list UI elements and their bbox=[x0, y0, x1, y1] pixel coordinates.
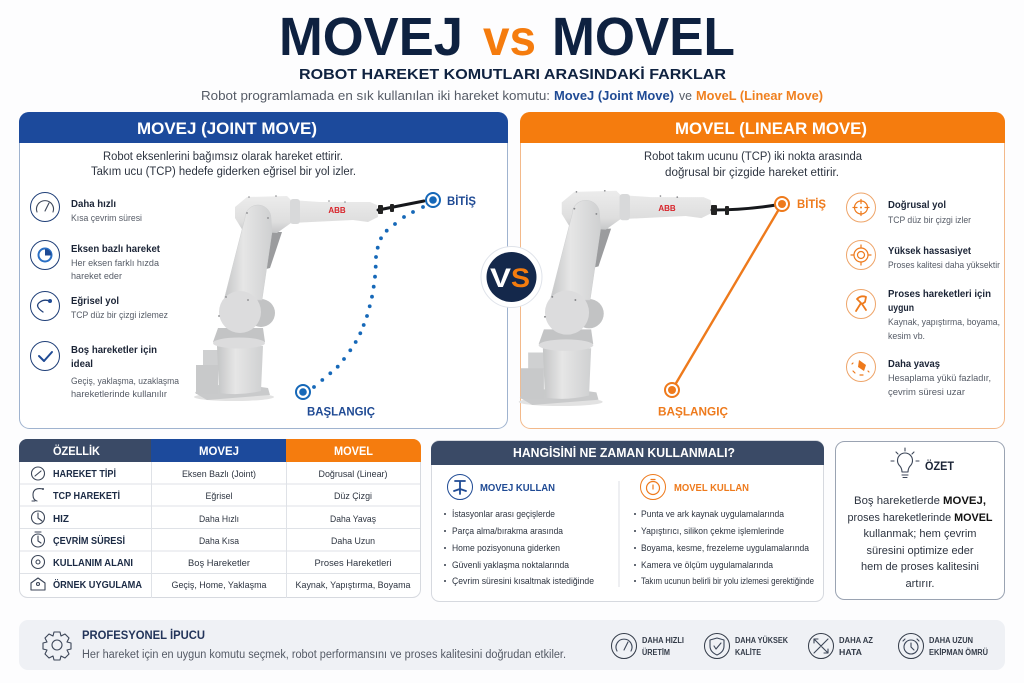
movel use list: Boyama, kesme, frezeleme uygulamalarında bbox=[641, 543, 809, 553]
when to use header bbox=[431, 441, 824, 465]
benefit: higher quality: KALİTE bbox=[735, 648, 762, 657]
robot arm left: ABB bbox=[328, 206, 346, 215]
movel use list: Kamera ve ölçüm uygulamalarında bbox=[641, 560, 773, 570]
end point: BİTİŞ bbox=[797, 196, 826, 211]
feature: daha hizli: Daha hızlı bbox=[71, 198, 116, 210]
feature: dogrusal yol bbox=[846, 193, 971, 226]
feature: egrisel yol bbox=[30, 292, 168, 321]
benefit: fewer errors: HATA bbox=[839, 648, 862, 657]
curved dotted path bbox=[312, 205, 425, 389]
feature: bos hareketler: hareketlerinde kullanılır bbox=[71, 389, 167, 400]
benefit: higher quality: DAHA YÜKSEK bbox=[735, 636, 788, 645]
row: hiz: Daha Yavaş bbox=[330, 514, 376, 525]
row: ornek uygulama: Geçiş, Home, Yaklaşma bbox=[172, 580, 267, 591]
feature: proses hareketleri: kesim vb. bbox=[888, 331, 925, 342]
row: tcp hareketi: TCP HAREKETİ bbox=[53, 489, 120, 502]
movel use list: MOVEL KULLAN bbox=[674, 482, 749, 494]
movej use list: Home pozisyonuna giderken bbox=[452, 543, 560, 553]
feature: daha hizli: Kısa çevrim süresi bbox=[71, 213, 142, 224]
row: kullanim alani: Boş Hareketler bbox=[188, 558, 250, 569]
summary text: proses hareketlerinde MOVEL bbox=[848, 512, 993, 524]
panel: pro tip bbox=[19, 620, 1005, 670]
start point: BAŞLANGIÇ bbox=[658, 404, 728, 418]
feature: daha yavas: Daha yavaş bbox=[888, 358, 940, 370]
feature: yuksek hassasiyet: Yüksek hassasiyet bbox=[888, 245, 971, 257]
movej use list: Güvenli yaklaşma noktalarında bbox=[452, 560, 569, 570]
movel header bbox=[520, 112, 1005, 143]
row: kullanim alani: Proses Hareketleri bbox=[314, 558, 392, 569]
benefit: fewer errors: DAHA AZ bbox=[839, 636, 873, 645]
icon: gear bbox=[43, 632, 71, 660]
movel use list: Punta ve ark kaynak uygulamalarında bbox=[641, 509, 784, 519]
row: hareket tipi: Eksen Bazlı (Joint) bbox=[182, 469, 256, 480]
title bbox=[279, 7, 735, 67]
title: MOVEJ bbox=[279, 7, 463, 67]
feature: daha yavas: Hesaplama yükü fazladır, bbox=[888, 373, 991, 384]
start point bbox=[296, 385, 375, 418]
intro line: Robot programlamada en sık kullanılan iki hareket komutu: bbox=[201, 88, 550, 103]
row: kullanim alani: KULLANIM ALANI bbox=[53, 558, 133, 569]
movej header: MOVEJ (JOINT MOVE) bbox=[137, 120, 317, 138]
feature: daha yavas: çevrim süresi uzar bbox=[888, 387, 965, 398]
benefit: faster production: ÜRETİM bbox=[642, 648, 670, 657]
feature: bos hareketler: Geçiş, yaklaşma, uzaklaşma bbox=[71, 376, 180, 387]
summary text: süresini optimize eder bbox=[866, 545, 974, 557]
benefit: faster production: DAHA HIZLI bbox=[642, 636, 684, 645]
row: tcp hareketi: Düz Çizgi bbox=[334, 491, 372, 502]
tip text: Her hareket için en uygun komutu seçmek, robot performansını ve proses kalitesini doğrudan etkiler. bbox=[82, 649, 566, 661]
summary text: kullanmak; hem çevrim bbox=[864, 528, 976, 540]
table header: ÖZELLİK bbox=[53, 445, 101, 458]
feature: proses hareketleri: Kaynak, yapıştırma, boyama, bbox=[888, 317, 1000, 328]
feature: bos hareketler: Boş hareketler için bbox=[71, 344, 157, 356]
row: ornek uygulama: ÖRNEK UYGULAMA bbox=[53, 578, 142, 591]
intro line: ve bbox=[679, 88, 692, 103]
feature: bos hareketler bbox=[30, 342, 180, 400]
benefit: higher quality bbox=[704, 634, 788, 658]
row: kullanim alani bbox=[32, 556, 392, 569]
feature: proses hareketleri: uygun bbox=[888, 302, 914, 314]
feature: proses hareketleri: Proses hareketleri için bbox=[888, 288, 991, 300]
feature: proses hareketleri bbox=[846, 288, 1000, 342]
row: cevrim suresi: ÇEVRİM SÜRESİ bbox=[53, 534, 125, 547]
summary text: Boş hareketlerde MOVEJ, bbox=[854, 495, 986, 507]
movel use list bbox=[634, 474, 814, 586]
summary heading: ÖZET bbox=[925, 460, 954, 473]
benefit: faster production bbox=[612, 634, 684, 658]
row: ornek uygulama bbox=[31, 578, 411, 591]
table header: MOVEJ bbox=[199, 444, 239, 458]
robot arm left bbox=[194, 195, 424, 401]
title: MOVEL bbox=[552, 7, 735, 67]
tip heading: PROFESYONEL İPUCU bbox=[82, 627, 205, 642]
feature: eksen bazli bbox=[30, 240, 160, 282]
intro line: MoveJ (Joint Move) bbox=[554, 88, 674, 103]
panel: summary bbox=[836, 442, 1004, 600]
feature: eksen bazli: Her eksen farklı hızda bbox=[71, 258, 160, 269]
robot arm right bbox=[519, 190, 776, 406]
title: vs bbox=[483, 10, 536, 66]
movej use list: Çevrim süresini kısaltmak istediğinde bbox=[452, 576, 594, 586]
row: hareket tipi: Doğrusal (Linear) bbox=[318, 469, 388, 480]
intro line bbox=[201, 88, 823, 103]
table header: MOVEL bbox=[334, 444, 373, 458]
panel: movel bbox=[519, 112, 1005, 428]
benefit: longer equipment life: DAHA UZUN bbox=[929, 636, 973, 645]
feature: yuksek hassasiyet: Proses kalitesi daha yüksektir bbox=[888, 260, 1000, 271]
vs badge bbox=[481, 246, 542, 308]
panel: movej bbox=[19, 112, 508, 428]
feature: eksen bazli: Eksen bazlı hareket bbox=[71, 243, 160, 255]
movej use list: İstasyonlar arası geçişlerde bbox=[452, 509, 555, 519]
summary text: artırır. bbox=[906, 578, 934, 590]
row: hiz: HIZ bbox=[53, 514, 69, 525]
feature: eksen bazli: hareket eder bbox=[71, 271, 122, 282]
feature: daha yavas bbox=[846, 352, 991, 398]
row: cevrim suresi: Daha Uzun bbox=[331, 536, 375, 547]
end point: BİTİŞ bbox=[447, 193, 476, 208]
vs badge: V bbox=[490, 263, 511, 293]
panel: when to use bbox=[431, 440, 824, 602]
feature: dogrusal yol: Doğrusal yol bbox=[888, 199, 946, 211]
end point bbox=[775, 196, 826, 211]
end point bbox=[426, 193, 476, 208]
vs badge: S bbox=[511, 263, 530, 293]
feature: bos hareketler: ideal bbox=[71, 358, 93, 370]
movej header bbox=[19, 112, 508, 143]
summary text: hem de proses kalitesini bbox=[861, 561, 979, 573]
row: hiz: Daha Hızlı bbox=[199, 514, 239, 525]
straight line path bbox=[672, 204, 782, 390]
movel description: Robot takım ucunu (TCP) iki nokta arasında bbox=[644, 151, 863, 163]
row: hareket tipi: HAREKET TİPİ bbox=[53, 467, 116, 480]
movej description: Takım ucu (TCP) hedefe giderken eğrisel bir yol izler. bbox=[91, 166, 356, 178]
movel use list: Yapıştırıcı, silikon çekme işlemlerinde bbox=[641, 526, 784, 536]
icon: light bulb bbox=[891, 448, 919, 478]
feature: dogrusal yol: TCP düz bir çizgi izler bbox=[888, 215, 971, 226]
table header bbox=[19, 439, 421, 462]
feature: daha hizli bbox=[30, 192, 142, 224]
benefit: fewer errors bbox=[808, 634, 873, 658]
feature: egrisel yol: Eğrisel yol bbox=[71, 295, 119, 307]
robot arm right: ABB bbox=[658, 204, 676, 213]
row: tcp hareketi bbox=[32, 488, 372, 502]
subtitle: ROBOT HAREKET KOMUTLARI ARASINDAKİ FARKLAR bbox=[299, 66, 726, 83]
feature: egrisel yol: TCP düz bir çizgi izlemez bbox=[71, 310, 168, 321]
row: hiz bbox=[32, 511, 376, 525]
summary text bbox=[848, 495, 993, 590]
benefit: longer equipment life: EKİPMAN ÖMRÜ bbox=[929, 648, 988, 657]
row: ornek uygulama: Kaynak, Yapıştırma, Boyama bbox=[296, 580, 411, 591]
intro line: MoveL (Linear Move) bbox=[696, 88, 823, 103]
movel header: MOVEL (LINEAR MOVE) bbox=[675, 120, 867, 138]
movej use list: Parça alma/bırakma arasında bbox=[452, 526, 563, 536]
start point: BAŞLANGIÇ bbox=[307, 404, 375, 418]
movej description: Robot eksenlerini bağımsız olarak hareket ettirir. bbox=[103, 151, 343, 163]
movel description: doğrusal bir çizgide hareket ettirir. bbox=[665, 167, 839, 179]
comparison table bbox=[19, 439, 421, 598]
feature: yuksek hassasiyet bbox=[846, 240, 1000, 271]
movel description bbox=[644, 151, 863, 179]
movej use list: MOVEJ KULLAN bbox=[480, 482, 555, 494]
row: hareket tipi bbox=[32, 467, 388, 480]
when to use header: HANGİSİNİ NE ZAMAN KULLANMALI? bbox=[513, 445, 735, 460]
movej use list bbox=[444, 474, 594, 586]
start point bbox=[658, 383, 728, 418]
row: cevrim suresi bbox=[32, 532, 375, 547]
movej description bbox=[91, 151, 356, 178]
row: tcp hareketi: Eğrisel bbox=[206, 491, 232, 502]
benefit: longer equipment life bbox=[898, 634, 988, 658]
row: cevrim suresi: Daha Kısa bbox=[199, 536, 240, 547]
movel use list: Takım ucunun belirli bir yolu izlemesi gerektiğinde bbox=[641, 576, 814, 586]
